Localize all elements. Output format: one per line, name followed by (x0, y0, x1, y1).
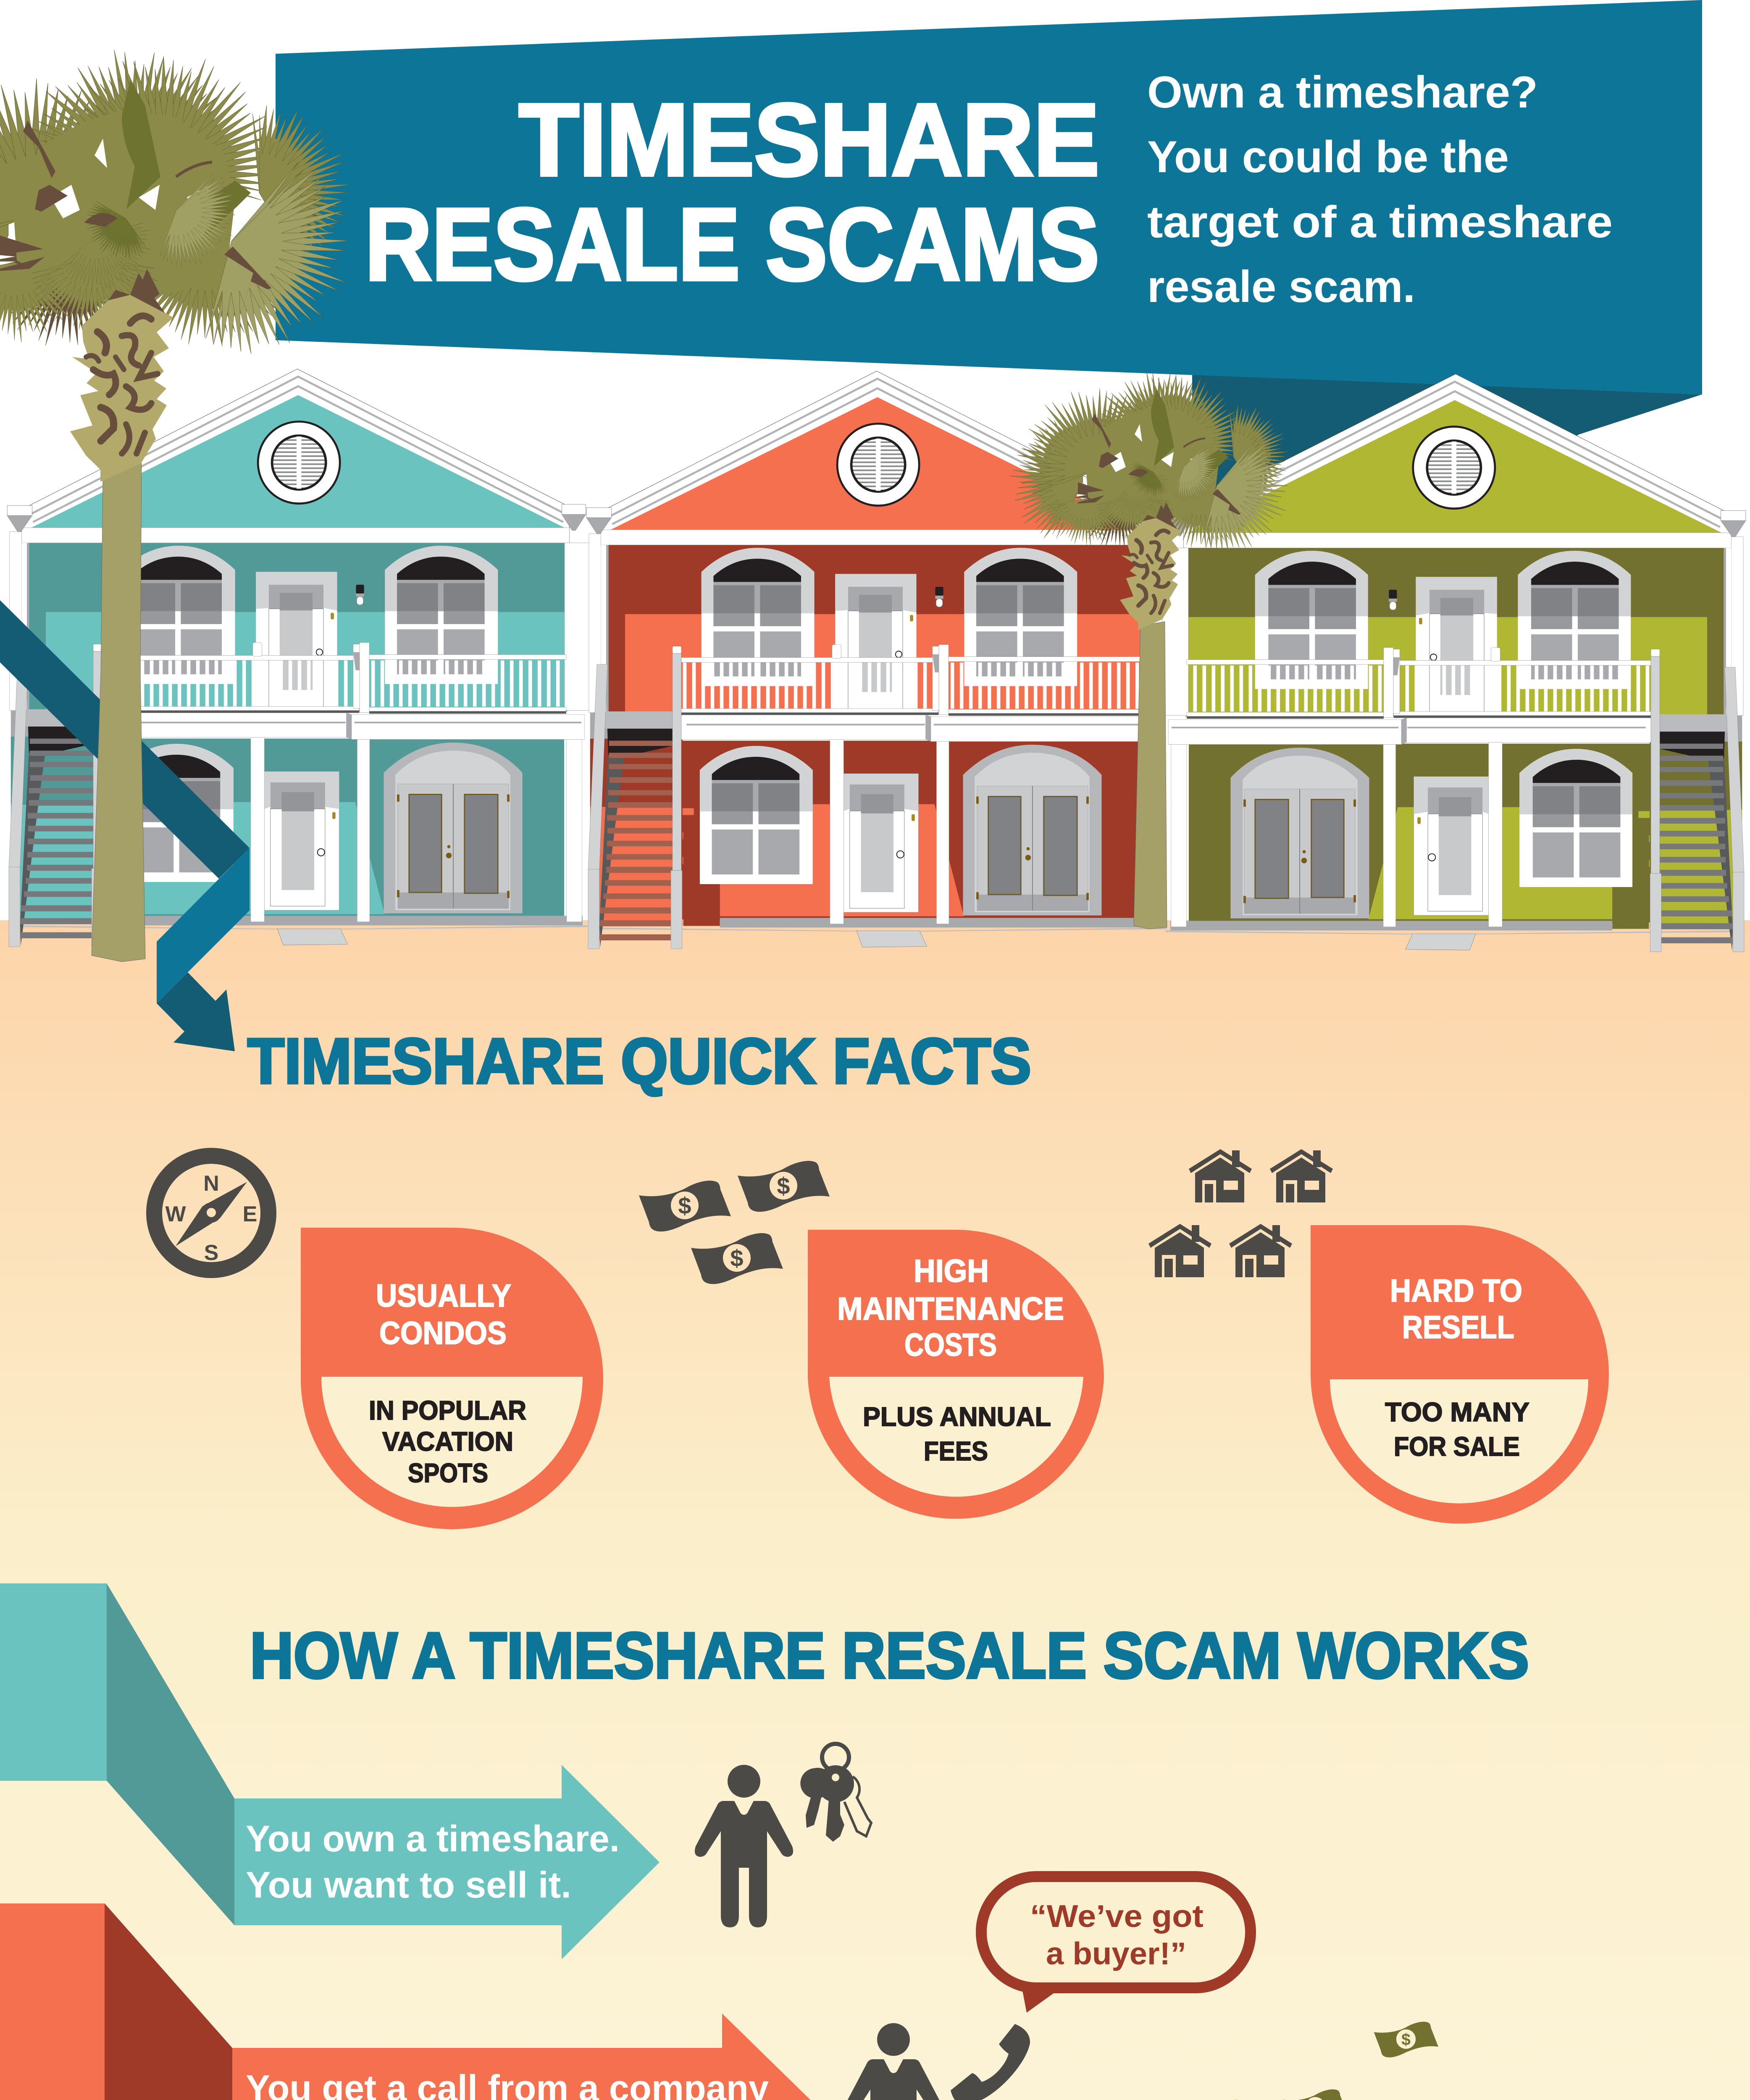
fact card: hard to resell: TOO MANY (1385, 1397, 1529, 1427)
fact card: high maintenance costs (808, 1230, 1104, 1519)
fact card: high maintenance costs: COSTS (904, 1327, 997, 1363)
title heading: TIMESHARE (519, 82, 1099, 197)
intro text: You could be the (1147, 131, 1509, 182)
folded ribbon arrow (0, 600, 250, 1051)
step 1 ribbon arrow: You want to sell it. (246, 1864, 571, 1906)
intro text: target of a timeshare (1147, 197, 1613, 247)
fact card: hard to resell (1311, 1225, 1609, 1524)
speech bubble: we've got a buyer (981, 1877, 1251, 2013)
title heading: RESALE SCAMS (365, 187, 1099, 302)
icon: keys (800, 1744, 871, 1842)
speech bubble: we've got a buyer: “We’ve got (1030, 1898, 1203, 1934)
fact card: usually condos: USUALLY (376, 1278, 511, 1314)
icon: compass: S (204, 1241, 218, 1265)
fact card: usually condos: VACATION (382, 1426, 513, 1457)
heading: how it works: HOW A TIMESHARE RESALE SCAM WORKS (250, 1619, 1529, 1692)
speech bubble: we've got a buyer: a buyer!” (1046, 1936, 1186, 1971)
step 1 ribbon arrow: You own a timeshare. (246, 1818, 620, 1859)
teal house (7, 369, 591, 947)
heading: quick facts: TIMESHARE QUICK FACTS (247, 1025, 1031, 1097)
sand background gradient (0, 920, 1750, 2100)
icon: compass (154, 1156, 268, 1270)
person with keys (695, 1744, 871, 1927)
fact card: high maintenance costs: FEES (924, 1436, 988, 1466)
fact card: high maintenance costs: HIGH (914, 1253, 989, 1289)
fact card: high maintenance costs: PLUS ANNUAL (863, 1402, 1051, 1432)
fact card: high maintenance costs: MAINTENANCE (837, 1291, 1064, 1327)
icon: money bills: $ (678, 1192, 691, 1219)
palm tree centre (990, 350, 1312, 929)
icon: flying green bills: $ (1401, 2031, 1411, 2049)
icon: compass: W (165, 1202, 186, 1226)
step 1 ribbon arrow (0, 1583, 660, 1959)
fact card: hard to resell: RESELL (1402, 1310, 1514, 1345)
fact card: usually condos: CONDOS (379, 1315, 507, 1351)
icon: money bills (639, 1161, 830, 1284)
icon: flying green bills (1187, 2022, 1438, 2100)
title banner (276, 0, 1702, 546)
icon: money bills: $ (730, 1245, 744, 1271)
fact card: hard to resell: HARD TO (1390, 1273, 1522, 1309)
olive house (1162, 374, 1746, 952)
intro text: Own a timeshare? (1147, 67, 1538, 117)
palm tree left (0, 16, 390, 962)
icon: four houses (1148, 1149, 1333, 1277)
step 2 ribbon arrow (0, 1903, 821, 2100)
icon: money bills: $ (777, 1173, 790, 1199)
icon: compass: E (243, 1202, 257, 1226)
fact card: usually condos (301, 1228, 603, 1529)
icon: compass: N (203, 1171, 219, 1196)
fact card: usually condos: IN POPULAR (369, 1395, 526, 1425)
fact card: hard to resell: FOR SALE (1394, 1431, 1520, 1462)
coral house (586, 371, 1170, 949)
intro text: resale scam. (1147, 261, 1415, 312)
title heading (365, 82, 1099, 302)
intro text (1147, 67, 1613, 312)
person with phone (844, 2023, 1030, 2100)
fact card: usually condos: SPOTS (408, 1458, 488, 1488)
